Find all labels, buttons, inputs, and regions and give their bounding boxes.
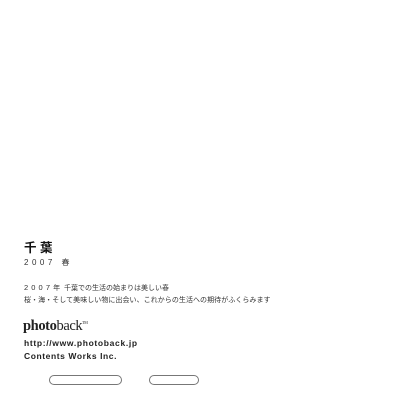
- button: short outline pill: [149, 375, 199, 385]
- button: long outline pill: [49, 375, 122, 385]
- title: 千 葉: [24, 241, 52, 255]
- url: http://www.photoback.jp: [24, 338, 138, 348]
- subtitle: year and season: 2007 春: [24, 258, 73, 267]
- text block: description: 桜・海・そして美味しい物に出会い、これからの生活への期待がふくらみます: [24, 297, 271, 304]
- logo: photoback: photobackTM: [23, 318, 87, 334]
- text block: tagline: 2007年 千葉での生活の始まりは美しい春: [24, 283, 169, 292]
- company name: Contents Works Inc.: [24, 351, 117, 361]
